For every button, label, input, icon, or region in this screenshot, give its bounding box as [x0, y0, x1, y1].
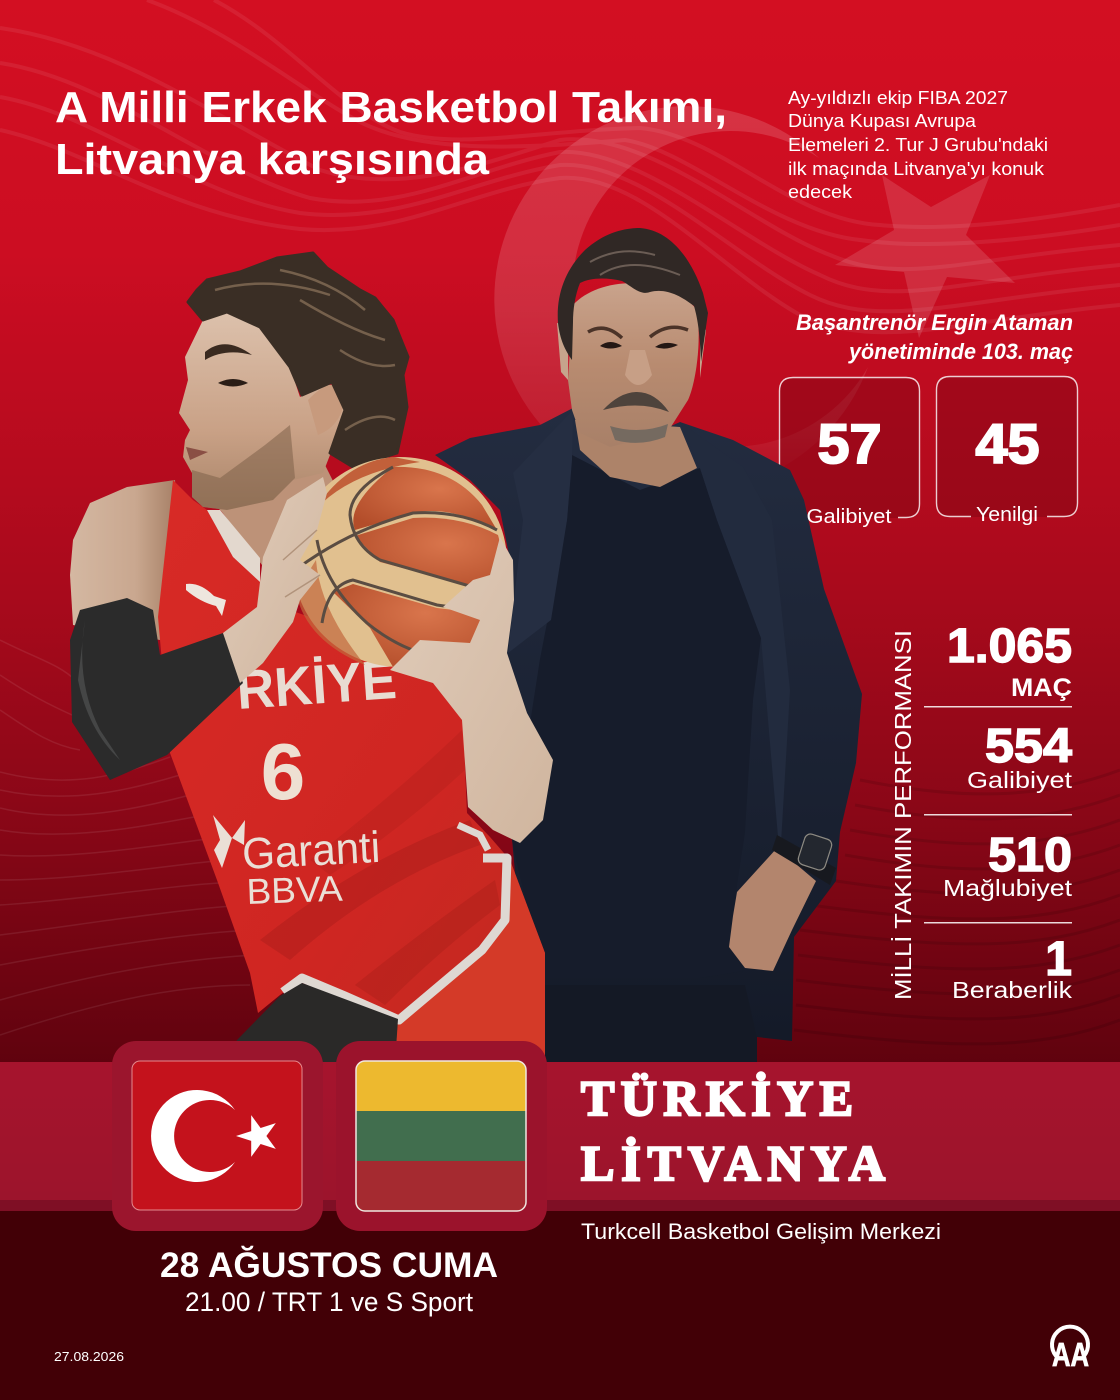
coach hand [729, 848, 816, 971]
match band [0, 1062, 1120, 1211]
coach jacket [435, 408, 862, 1041]
basketball [293, 457, 507, 667]
shorts trim [283, 858, 507, 1020]
stat box: losses: 45 [976, 412, 1040, 475]
jersey wordmark: RKİYE [235, 648, 398, 721]
player face [179, 312, 350, 510]
title: A Milli Erkek Basketbol Takımı, [55, 83, 727, 132]
coach hair [558, 228, 708, 362]
wave lines [0, 0, 1120, 1044]
coach ears [557, 323, 568, 380]
coach stat label over figure: Galibiyet [806, 506, 892, 528]
coach watch [772, 832, 836, 885]
player ear [308, 385, 345, 435]
stat: draws: 1 [1045, 933, 1072, 986]
stat box: wins: 57 [818, 412, 882, 475]
stat: wins: 554 [985, 720, 1072, 773]
coach eyes and brows [588, 327, 688, 338]
jersey collar [207, 510, 260, 582]
stat: draws [952, 933, 1073, 1003]
stat: games: 1.065 [947, 620, 1072, 673]
jersey number: 6 [261, 727, 305, 816]
intro text [788, 88, 1048, 202]
player hair [188, 253, 408, 467]
coach face [568, 283, 699, 447]
coach subtitle: yönetiminde 103. maç [848, 339, 1073, 364]
puma logo [186, 584, 226, 616]
jersey sponsor: Garanti [241, 823, 381, 879]
Anadolu Agency logo [1052, 1327, 1089, 1373]
stat: games: MAÇ [1011, 674, 1072, 702]
publication date: 27.08.2026 [54, 1350, 124, 1364]
player beard [192, 425, 295, 510]
stat: losses [943, 829, 1073, 901]
venue: Turkcell Basketbol Gelişim Merkezi [581, 1219, 941, 1244]
title: Litvanya karşısında [55, 135, 490, 184]
stat: losses: Mağlubiyet [943, 875, 1073, 901]
player arm sleeve [70, 598, 243, 780]
match time and channels: 21.00 / TRT 1 ve S Sport [185, 1287, 473, 1317]
national team vertical label: MİLLİ TAKIMIN PERFORMANSI [890, 630, 916, 1000]
coach subtitle [796, 310, 1073, 364]
stat: losses: 510 [988, 829, 1072, 882]
intro text: ilk maçında Litvanya'yı konuk [788, 159, 1045, 179]
coach figure [435, 228, 862, 1064]
player figure: BBVA [246, 868, 343, 912]
player shoulder [70, 480, 180, 640]
coach pants [532, 975, 757, 1064]
team names: LİTVANYA [581, 1135, 885, 1191]
flag card: Türkiye [112, 1041, 323, 1231]
jersey folds [260, 820, 480, 960]
coach subtitle: Başantrenör Ergin Ataman [796, 310, 1073, 335]
stat box: wins [779, 377, 920, 518]
player neck [215, 465, 335, 565]
stat box: losses: Yenilgi [976, 504, 1038, 526]
stat: games [947, 620, 1072, 702]
stat box: losses [936, 376, 1078, 526]
player right arm and hand [390, 537, 553, 843]
coach t-shirt [512, 455, 761, 978]
bottom dark band [0, 1200, 1120, 1400]
stat: wins [967, 720, 1073, 793]
stat: wins: Galibiyet [967, 767, 1073, 793]
coach neck [575, 420, 697, 487]
intro text: edecek [788, 182, 853, 202]
intro text: Elemeleri 2. Tur J Grubu'ndaki [788, 135, 1048, 155]
team names: TÜRKİYE [581, 1070, 853, 1126]
stat: draws: Beraberlik [952, 977, 1073, 1003]
title [55, 83, 727, 184]
flag card: Litvanya [336, 1041, 547, 1231]
player figure [70, 253, 553, 1064]
match date: 28 AĞUSTOS CUMA [160, 1245, 498, 1285]
player left hand [223, 477, 327, 683]
intro text: Dünya Kupası Avrupa [788, 111, 977, 131]
coach lapels [508, 410, 573, 653]
player jersey [158, 480, 545, 1064]
Anadolu Agency logo: AA [1052, 1336, 1089, 1373]
national team stats [924, 620, 1073, 1003]
decorative crescent and star [494, 106, 1015, 492]
coach moustache [603, 392, 669, 412]
team names [581, 1070, 885, 1191]
intro text: Ay-yıldızlı ekip FIBA 2027 [788, 88, 1008, 108]
player leg sleeve [225, 983, 398, 1064]
